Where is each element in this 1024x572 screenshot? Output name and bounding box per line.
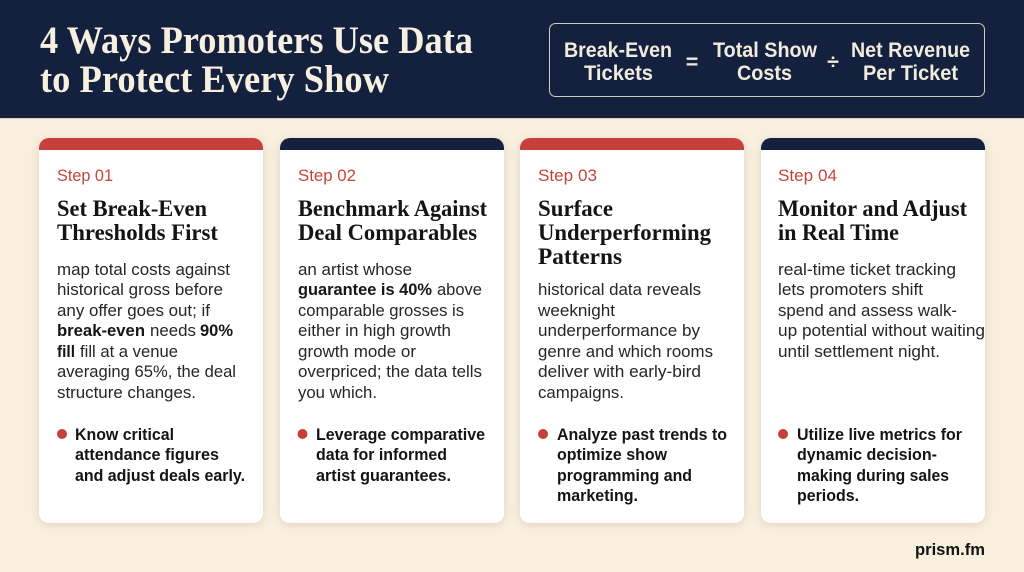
panel: step 01: Know critical — [75, 425, 174, 444]
panel: step 04 — [761, 138, 985, 523]
panel: step 01: structure changes. — [57, 383, 196, 402]
panel: step 01: 90% — [200, 321, 233, 340]
panel: step 02: artist guarantees. — [316, 466, 451, 485]
panel: step 02 — [280, 138, 504, 523]
panel: step 03: programming and — [557, 466, 692, 485]
panel: step 02: comparable grosses is — [298, 301, 464, 320]
panel: step 01: attendance figures — [75, 445, 219, 464]
title: 4 Ways Promoters Use Data — [40, 18, 473, 62]
panel: step 04: in Real Time — [778, 220, 899, 245]
panel: step 04: up potential without waiting — [778, 321, 985, 340]
panel: step 04: lets promoters shift — [778, 280, 923, 299]
break-even formula box — [550, 24, 984, 96]
panel: step 02: guarantee is 40% — [298, 280, 432, 299]
panel: step 03: underperformance by — [538, 321, 700, 340]
panel: step 01: Thresholds First — [57, 220, 218, 245]
panel: step 04: periods. — [797, 486, 859, 505]
panel: step 03: deliver with early-bird — [538, 362, 701, 381]
break-even formula box: Tickets — [584, 61, 653, 85]
panel: step 04: dynamic decision- — [797, 445, 937, 464]
panel: step 01: historical gross before — [57, 280, 223, 299]
panel: step 02: Leverage comparative — [316, 425, 485, 444]
panel: step 03: Surface — [538, 196, 613, 221]
panel: step 02: you which. — [298, 383, 377, 402]
panel: step 02: overpriced; the data tells — [298, 362, 482, 381]
panel: step 04: Step 04 — [778, 166, 837, 185]
break-even formula box: ÷ — [827, 50, 839, 74]
panel: step 03: Analyze past trends to — [557, 425, 727, 444]
panel: step 01: Step 01 — [57, 166, 113, 185]
panel: step 01: break-even — [57, 321, 145, 340]
panel: step 01: needs — [150, 321, 196, 340]
panel: step 01: fill — [57, 342, 75, 361]
header band — [0, 0, 1024, 119]
title — [40, 18, 473, 101]
panel: step 04: Monitor and Adjust — [778, 196, 967, 221]
panel: step 01: Set Break-Even — [57, 196, 207, 221]
panel: step 03: genre and which rooms — [538, 342, 713, 361]
brand footer: prism.fm — [915, 540, 985, 559]
panel: step 04: until settlement night. — [778, 342, 940, 361]
break-even formula box: Per Ticket — [863, 61, 958, 85]
break-even formula box: Costs — [737, 61, 792, 85]
panel: step 03: Step 03 — [538, 166, 597, 185]
panel: step 03: Underperforming — [538, 220, 711, 245]
panel: step 04: Utilize live metrics for — [797, 425, 962, 444]
break-even formula box: Total Show — [713, 38, 817, 62]
title: to Protect Every Show — [40, 57, 389, 101]
break-even formula box: = — [686, 50, 698, 74]
panel: step 01: and adjust deals early. — [75, 466, 245, 485]
panel: step 01: map total costs against — [57, 260, 230, 279]
panel: step 03: optimize show — [557, 445, 668, 464]
panel: step 02: growth mode or — [298, 342, 416, 361]
panel: step 02: either in high growth — [298, 321, 451, 340]
panel: step 02: Step 02 — [298, 166, 356, 185]
panel: step 03: marketing. — [557, 486, 638, 505]
panel: step 02: Benchmark Against — [298, 196, 487, 221]
panel: step 02: data for informed — [316, 445, 447, 464]
panel: step 03 — [520, 138, 744, 523]
panel: step 03: Patterns — [538, 244, 622, 269]
panel: step 03: historical data reveals — [538, 280, 701, 299]
panel: step 03: weeknight — [537, 301, 615, 320]
panel: step 02: an artist whose — [298, 260, 412, 279]
panel: step 01: averaging 65%, the deal — [57, 362, 236, 381]
panel: step 01: fill at a venue — [80, 342, 178, 361]
panel: step 02: Deal Comparables — [298, 220, 477, 245]
panel: step 04: real-time ticket tracking — [778, 260, 956, 279]
panel: step 01: any offer goes out; if — [57, 301, 210, 320]
panel: step 01 — [39, 138, 263, 523]
panel: step 03: campaigns. — [538, 383, 624, 402]
panel: step 04: making during sales — [797, 466, 949, 485]
panel: step 02: above — [437, 280, 482, 299]
panel: step 04: spend and assess walk- — [778, 301, 957, 320]
break-even formula box: Break-Even — [564, 38, 672, 62]
break-even formula box: Net Revenue — [851, 38, 970, 62]
